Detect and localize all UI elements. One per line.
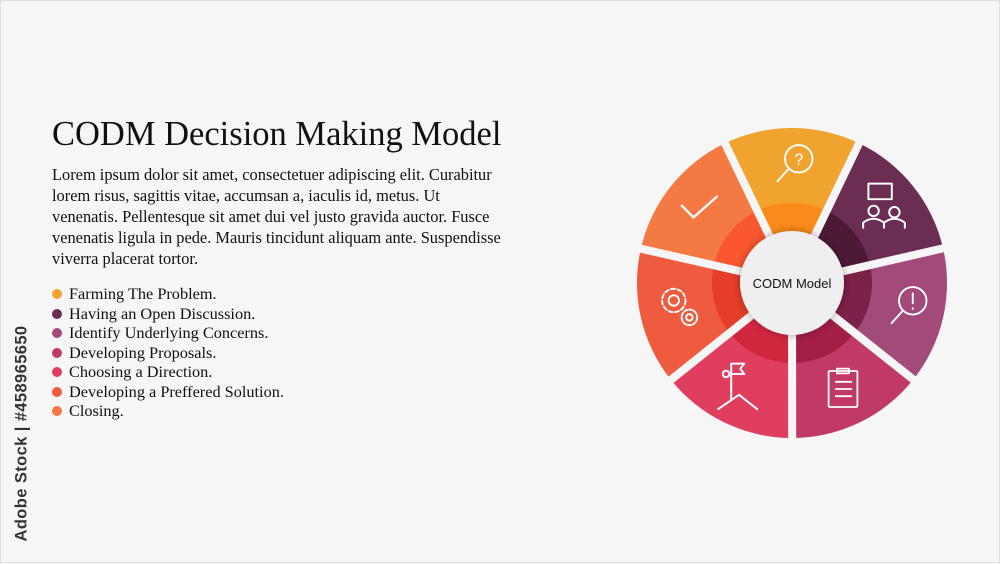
icon: person with flag [718, 364, 757, 409]
segment 5 [664, 294, 833, 452]
icon: discussion people [863, 184, 905, 228]
legend list: Developing Proposals. [69, 342, 216, 362]
watermark id: Adobe Stock | #458965650 [12, 326, 30, 542]
text block: description [52, 165, 501, 268]
icon: magnifier question [778, 145, 812, 181]
icon: gears [662, 289, 697, 325]
icon: magnifier question: ? [794, 151, 803, 169]
icon: clipboard [829, 369, 857, 407]
text block: description: viverra placerat tortor. [52, 249, 198, 268]
legend list [52, 284, 284, 420]
legend list: Developing a Preffered Solution. [69, 382, 284, 400]
segment 3 [821, 228, 958, 383]
segment 1 [725, 128, 859, 238]
text block: description: Lorem ipsum dolor sit amet, consectetuer adipiscing elit. Curabitur [52, 165, 492, 184]
segment 6 [626, 228, 763, 383]
icon: checkmark [682, 197, 717, 217]
center circle label: CODM Model [753, 276, 831, 291]
icon: magnifier exclamation [892, 287, 926, 323]
center circle label [740, 231, 844, 335]
segment 4 [751, 294, 920, 452]
legend list: Farming The Problem. [69, 284, 217, 303]
text block: description: venenatis ligula in pede. Mauris tincidunt aliquam ante. Suspendisse [52, 228, 501, 247]
legend list: Having an Open Discussion. [69, 304, 255, 322]
segment 2 [785, 134, 955, 307]
legend list: Choosing a Direction. [69, 362, 212, 381]
legend list: Closing. [69, 401, 124, 420]
text block: description: lorem risus, sagittis vitae, accumsan a, iaculis id, metus. Ut [52, 186, 440, 205]
text block: description: venenatis. Pellentesque sit amet dui vel justo gravida auctor. Fusce [52, 207, 489, 226]
segment 7 [629, 134, 799, 307]
legend list: Identify Underlying Concerns. [69, 323, 268, 342]
title: CODM Decision Making Model [52, 115, 501, 153]
